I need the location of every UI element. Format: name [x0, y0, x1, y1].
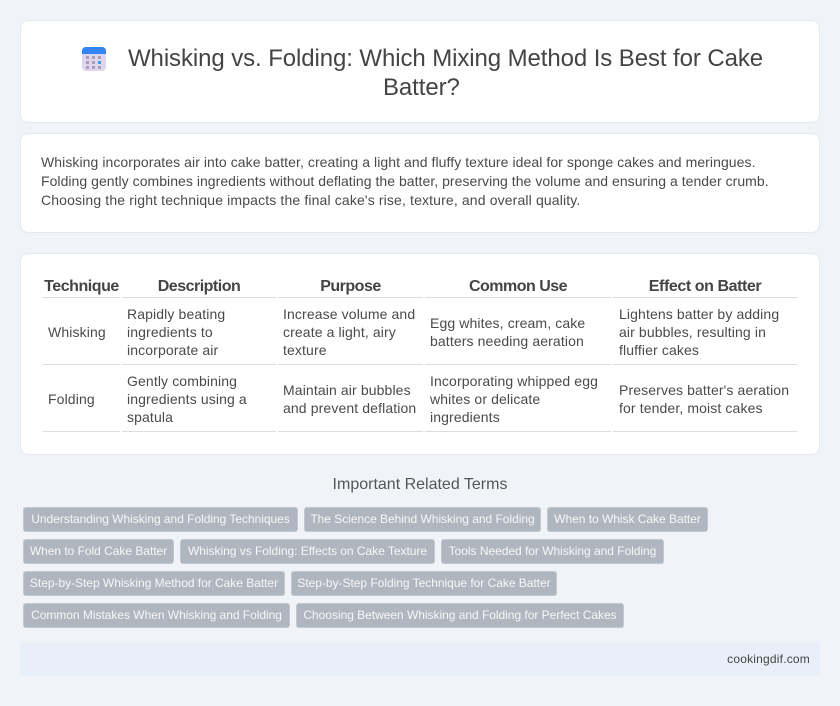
footer source: cookingdif.com	[727, 652, 810, 666]
related terms tags	[23, 507, 708, 628]
title: Whisking vs. Folding: Which Mixing Method Is Best for Cake	[128, 45, 763, 72]
Folding purpose: Maintain air bubbles	[283, 382, 411, 398]
panel: introduction	[20, 133, 820, 233]
column heading: Common Use: Common Use	[469, 278, 567, 295]
Folding effect: for tender, moist cakes	[619, 400, 763, 416]
tag: Step-by-Step Folding Technique for Cake Batter	[297, 576, 551, 590]
Whisking effect: air bubbles, resulting in	[619, 324, 766, 340]
tag	[304, 507, 541, 532]
Folding effect	[619, 382, 789, 416]
tag	[23, 603, 290, 628]
tag	[23, 507, 298, 532]
column heading: Description: Description	[158, 278, 240, 295]
title	[128, 45, 763, 101]
text: introduction: Folding gently combines ingredients without deflating the batter, preserving the volume and ensuring a tender crumb.	[41, 173, 769, 189]
tag	[291, 571, 557, 596]
Whisking effect: Lightens batter by adding	[619, 306, 779, 322]
Whisking common use	[430, 315, 585, 349]
text: introduction	[41, 154, 769, 208]
text: introduction: Choosing the right technique impacts the final cake's rise, texture, and overall quality.	[41, 192, 580, 208]
Whisking description: ingredients to	[127, 324, 213, 340]
tag: When to Whisk Cake Batter	[554, 512, 701, 526]
column heading: Effect on Batter: Effect on Batter	[649, 278, 761, 295]
table: comparison	[43, 297, 797, 432]
heading: related terms: Important Related Terms	[333, 476, 507, 493]
tag: Step-by-Step Whisking Method for Cake Batter	[30, 576, 278, 590]
tag	[180, 539, 435, 564]
Folding purpose: and prevent deflation	[283, 400, 416, 416]
Folding description: Gently combining	[127, 373, 237, 389]
text: introduction: Whisking incorporates air into cake batter, creating a light and fluffy texture ideal for sponge cakes and meringues.	[41, 154, 756, 170]
icon: calendar	[82, 47, 106, 71]
tag	[296, 603, 624, 628]
Folding common use: whites or delicate	[430, 391, 540, 407]
Folding common use	[430, 373, 598, 425]
Whisking purpose: texture	[283, 342, 327, 358]
column heading: Purpose: Purpose	[320, 278, 381, 295]
tag: Whisking vs Folding: Effects on Cake Texture	[188, 544, 427, 558]
Whisking common use: Egg whites, cream, cake	[430, 315, 585, 331]
Folding description: ingredients using a	[127, 391, 247, 407]
Folding description: spatula	[127, 409, 173, 425]
title: Batter?	[383, 74, 460, 101]
tag: When to Fold Cake Batter	[30, 544, 167, 558]
Whisking effect	[619, 306, 779, 358]
row 1: Whisking: Whisking	[48, 324, 106, 340]
column heading: Technique: Technique	[44, 278, 119, 295]
Whisking description: incorporate air	[127, 342, 218, 358]
Whisking purpose: create a light, airy	[283, 324, 396, 340]
tag	[547, 507, 708, 532]
tag: Understanding Whisking and Folding Techniques	[31, 512, 290, 526]
Folding description	[127, 373, 247, 425]
Whisking description: Rapidly beating	[127, 306, 225, 322]
tag	[23, 539, 174, 564]
Whisking common use: batters needing aeration	[430, 333, 584, 349]
Folding common use: Incorporating whipped egg	[430, 373, 598, 389]
Whisking description	[127, 306, 225, 358]
Whisking effect: fluffier cakes	[619, 342, 699, 358]
Folding purpose	[283, 382, 416, 416]
Folding effect: Preserves batter's aeration	[619, 382, 789, 398]
tag	[23, 571, 285, 596]
panel: comparison table	[20, 253, 820, 455]
tag: Common Mistakes When Whisking and Folding	[31, 608, 282, 622]
tag: The Science Behind Whisking and Folding	[310, 512, 535, 526]
tag: Choosing Between Whisking and Folding for Perfect Cakes	[303, 608, 617, 622]
row 2: Folding: Folding	[48, 391, 95, 407]
Whisking purpose: Increase volume and	[283, 306, 415, 322]
panel: title header	[20, 20, 820, 123]
tag	[441, 539, 664, 564]
Whisking purpose	[283, 306, 415, 358]
footer bar	[20, 642, 820, 676]
Folding common use: ingredients	[430, 409, 500, 425]
tag: Tools Needed for Whisking and Folding	[449, 544, 656, 558]
